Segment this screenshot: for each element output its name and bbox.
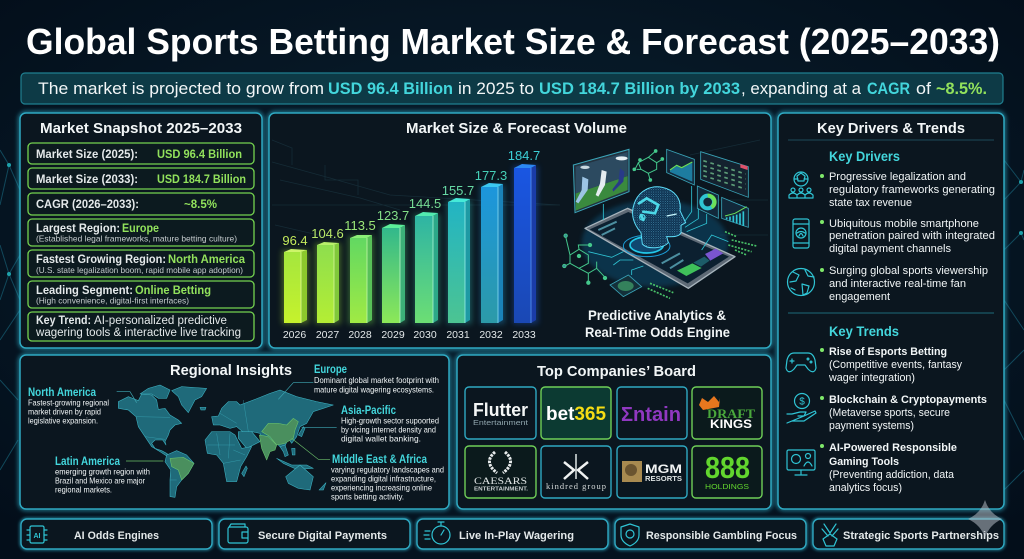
bar 2029 (377, 208, 409, 341)
logo: 888 Holdings (692, 446, 762, 498)
banner sentence: , expanding at a (741, 79, 862, 98)
logo: Entain: Σntain (621, 404, 681, 426)
illustration caption: Predictive Analytics & (588, 307, 726, 323)
icon: shield (621, 524, 639, 546)
row: largest region: Largest Region: (36, 223, 120, 235)
trend: responsible gaming: Gaming Tools (829, 456, 899, 468)
row: largest region (28, 219, 254, 246)
trend: esports: (Competitive events, fantasy (829, 359, 962, 371)
icon: game controller (786, 353, 816, 372)
row: fastest growing region: (U.S. state legalization boom, rapid mobile app adoption) (36, 265, 243, 275)
banner sentence: of (916, 79, 931, 98)
row: market size 2025: Market Size (2025): (36, 149, 138, 161)
region: Latin America: emerging growth region with (55, 466, 150, 476)
row: key trend: wagering tools & interactive live tracking (35, 327, 241, 339)
footer pill: AI odds engines (21, 519, 212, 549)
faint stadium backdrop (272, 140, 768, 240)
logo: Flutter: Flutter (473, 400, 528, 420)
bar 2028 (344, 218, 376, 341)
bar chart (282, 148, 540, 341)
title: Global Sports Betting Market Size & Forecast (2025–2033) (26, 21, 1000, 62)
driver: legalization: Progressive legalization and (829, 171, 966, 183)
driver: legalization: state tax revenue (829, 197, 912, 209)
bar 2033: 2033 (512, 329, 536, 341)
icon: globe (788, 268, 814, 296)
footer pill: strategic sports partnerships (813, 519, 1004, 549)
row: largest region: Europe (122, 223, 159, 235)
banner sentence (38, 79, 987, 98)
region: North America: market driven by rapid (28, 406, 101, 416)
india (259, 435, 277, 460)
eurasia (212, 390, 333, 450)
row: leading segment (28, 281, 254, 308)
bar 2031 (442, 183, 474, 341)
bar 2031: 155.7 (442, 183, 474, 198)
footer pill: secure digital payments: Secure Digital Payments (258, 530, 387, 542)
bar 2027 (311, 226, 344, 341)
icon: hand with coin (787, 394, 816, 423)
logo: DraftKings: KINGS (710, 417, 752, 431)
region: North America (28, 385, 109, 426)
bar 2026 (282, 233, 309, 341)
footer pill: responsible gambling focus (615, 519, 806, 549)
country borders (136, 400, 248, 480)
watermark star (968, 500, 1002, 538)
decorative network lines (0, 150, 1024, 490)
north america (118, 394, 182, 456)
drivers heading: Key Drivers & Trends (817, 120, 965, 137)
bar 2028: 2028 (348, 329, 372, 341)
logo: Kindred (541, 446, 611, 498)
trend: esports: wager integration) (828, 372, 915, 384)
illustration caption: Real-Time Odds Engine (585, 324, 730, 340)
trend: responsible gaming (820, 442, 957, 494)
bar 2032: 2032 (479, 329, 503, 341)
footer pill: secure digital payments (219, 519, 410, 549)
south america (165, 451, 194, 497)
row: market size 2025: USD 96.4 Billion (157, 149, 242, 161)
row: key trend (28, 312, 254, 341)
driver: viewership: engagement (829, 291, 890, 303)
world map (117, 383, 337, 497)
logo: bet365 (541, 387, 611, 439)
row: market size 2033: Market Size (2033): (36, 174, 138, 186)
section: key drivers (788, 149, 995, 303)
logo: MGM Resorts: MGM (645, 462, 682, 476)
region: North America: North America (28, 385, 96, 399)
region: Europe (314, 364, 439, 394)
icon: crowd and ball (789, 172, 813, 198)
brazil (170, 457, 194, 480)
icon: wallet (228, 524, 248, 543)
banner sentence: The market is projected to grow from (38, 79, 324, 98)
region: Middle East and Africa: sports betting activity. (331, 492, 404, 502)
trend: blockchain: payment systems) (829, 420, 914, 432)
bar 2030: 144.5 (409, 196, 441, 211)
chart heading: Market Size & Forecast Volume (406, 120, 627, 137)
panel: regional insights (20, 355, 449, 509)
region: North America: Fastest-growing regional (28, 398, 109, 408)
row: fastest growing region (28, 250, 254, 277)
logo: MGM Resorts: RESORTS (645, 476, 682, 483)
region: Latin America (55, 454, 150, 494)
region: Europe: Dominant global market footprint with (314, 375, 439, 385)
greenland (172, 387, 207, 413)
trend: esports: Rise of Esports Betting (829, 346, 947, 358)
row: fastest growing region: Fastest Growing Region: (36, 254, 166, 266)
section: key trends (786, 324, 987, 494)
bar 2031: 2031 (446, 329, 470, 341)
logo: DraftKings (692, 387, 762, 439)
footer pill: responsible gambling focus: Responsible Gambling Focus (646, 530, 797, 542)
footer pill: AI odds engines: AI Odds Engines (74, 530, 159, 542)
head (623, 187, 686, 257)
region: Middle East and Africa: experiencing increasing online (331, 482, 432, 492)
southeast asia (277, 427, 313, 469)
driver: viewership: Surging global sports viewership (829, 265, 988, 277)
driver: legalization (820, 171, 995, 209)
region: Asia-Pacific (341, 403, 439, 444)
board heading: Top Companies’ Board (537, 363, 696, 380)
bar 2032 (475, 168, 507, 341)
panel: market size and forecast (269, 113, 771, 348)
icon: AI chip: AI (34, 533, 41, 540)
section: key drivers: Key Drivers (829, 149, 900, 164)
region: Europe: Europe (314, 364, 347, 376)
icon: hand with coin: $ (799, 396, 805, 408)
phone (585, 208, 735, 288)
illustration: AI odds engine (563, 149, 757, 298)
banner (21, 73, 1003, 104)
region: Asia-Pacific: Asia-Pacific (341, 403, 396, 417)
row: CAGR (28, 193, 254, 215)
bar 2028: 113.5 (344, 218, 376, 233)
row: leading segment: Leading Segment: (36, 285, 133, 297)
bar 2032: 177.3 (475, 168, 507, 183)
logo: Flutter: Entertainment (473, 418, 529, 427)
row: key trend: Key Trend: (36, 315, 91, 327)
row: leading segment: (High convenience, digital-first interfaces) (36, 296, 189, 306)
logo: 888 Holdings: HOLDINGS (705, 482, 749, 491)
banner sentence: in 2025 to (458, 79, 534, 98)
arabia (238, 432, 260, 448)
banner sentence: USD 96.4 Billion (328, 79, 453, 98)
new zealand (319, 483, 326, 490)
panel: key drivers and trends (778, 113, 1004, 509)
screen: video (573, 149, 629, 213)
logo: bet365: bet365 (546, 404, 606, 425)
china (262, 418, 298, 445)
icon: smartphone (793, 219, 809, 248)
logo: Flutter (465, 387, 536, 439)
footer pill: strategic sports partnerships: Strategic Sports Partnerships (843, 530, 999, 542)
row: leading segment: Online Betting (135, 285, 211, 297)
arctic islands (140, 385, 170, 398)
regional heading: Regional Insights (170, 362, 292, 379)
region: Asia-Pacific: High-growth sector supoorted (341, 416, 439, 426)
glow under phone (582, 200, 728, 287)
bar 2030 (409, 196, 441, 341)
screen: donut (697, 186, 718, 218)
row: CAGR: CAGR (2026–2033): (36, 199, 139, 211)
bar 2029: 2029 (381, 329, 405, 341)
logo: DraftKings: DRAFT (707, 406, 755, 421)
banner sentence: USD 184.7 Billion by 2033 (539, 79, 740, 98)
panel: top companies board (457, 355, 771, 509)
logo: Caesars: ENTERTAINMENT. (474, 486, 529, 492)
molecule top (633, 150, 664, 181)
driver: mobile: digital payment channels (829, 243, 952, 255)
footer pill: live in-play wagering: Live In-Play Wagering (459, 530, 574, 542)
region: Middle East and Africa: Middle East & Africa (332, 452, 427, 466)
logo: Caesars (465, 446, 536, 498)
screen: odds table (701, 152, 748, 197)
screen: chart (667, 149, 694, 185)
row: market size 2025 (28, 143, 254, 164)
trend: responsible gaming: (Preventing addiction, data (829, 469, 955, 481)
bar 2026: 96.4 (282, 233, 308, 248)
logo: 888 Holdings: 888 (705, 450, 750, 485)
trend: blockchain: Blockchain & Cryptopayments (829, 394, 987, 406)
bar 2033 (508, 148, 540, 341)
region: Middle East and Africa: expanding digital infrastructure, (331, 474, 436, 484)
trend: blockchain: (Metaverse sports, secure (829, 407, 950, 419)
trend: responsible gaming: AI-Powered Responsible (829, 442, 957, 454)
row: market size 2033: USD 184.7 Billion (157, 174, 246, 186)
driver: mobile: Ubiquitous mobile smartphone (829, 218, 979, 230)
bar 2026: 2026 (283, 329, 306, 341)
row: largest region: (Established legal frameworks, mature betting culture) (36, 234, 237, 244)
logo: Kindred: kindred group (546, 481, 606, 491)
illustration caption (585, 307, 730, 340)
trend: esports (820, 346, 962, 384)
bar 2027: 104.6 (311, 226, 344, 241)
section: key trends: Key Trends (829, 324, 899, 339)
row: market size 2033 (28, 168, 254, 189)
snapshot heading: Market Snapshot 2025–2033 (40, 121, 242, 137)
region: Latin America: Brazil and Mexico are major (55, 476, 145, 486)
region: Latin America: regional markets. (55, 484, 112, 494)
driver: viewership (820, 265, 988, 303)
leader lines (117, 383, 337, 428)
region: Asia-Pacific: digital wallet banking. (341, 434, 421, 444)
region: Latin America: Latin America (55, 454, 120, 468)
region: Middle East and Africa: varying regulatory landscapes and (331, 464, 444, 474)
icon: stopwatch (424, 522, 450, 544)
row: fastest growing region: North America (168, 254, 246, 266)
trend: responsible gaming: analytics focus) (829, 482, 902, 494)
driver: legalization: regulatory frameworks generating (829, 184, 995, 196)
chip (610, 275, 642, 297)
banner sentence: ~8.5%. (936, 79, 987, 98)
logo: MGM Resorts (617, 446, 687, 498)
logo: Entain (617, 387, 687, 439)
region: Middle East and Africa (331, 452, 444, 502)
molecule left (563, 234, 607, 284)
africa (205, 432, 252, 482)
bar 2030: 2030 (413, 329, 437, 341)
region: Europe: mature digital wagering ecosystems. (314, 384, 434, 394)
bar 2027: 2027 (316, 329, 339, 341)
iceland (200, 407, 206, 410)
driver: viewership: and interactive real-time fan (829, 278, 966, 290)
driver: mobile: penetration paired with integrated (829, 230, 995, 242)
panel: market snapshot (20, 113, 262, 348)
banner sentence: CAGR (867, 79, 910, 98)
row: CAGR: ~8.5% (184, 199, 217, 211)
bar 2029: 123.7 (377, 208, 409, 223)
region: Asia-Pacific: by vicing internet density and (341, 424, 436, 434)
bar 2033: 184.7 (508, 148, 540, 163)
trend: blockchain (820, 394, 987, 432)
footer pill: live in-play wagering (417, 519, 608, 549)
row: key trend: AI-personalized predictive (94, 315, 227, 327)
icon: medal (822, 524, 838, 546)
circuit lines (588, 186, 728, 275)
driver: mobile (820, 218, 995, 255)
logo: Caesars: CAESARS (474, 477, 527, 487)
icon: AI chip (27, 526, 47, 543)
region: North America: legislative expansion. (28, 416, 98, 426)
australia (286, 465, 313, 490)
madagascar (242, 466, 247, 477)
icon: monitor with user (787, 450, 815, 475)
screen: growth chart (722, 197, 748, 227)
